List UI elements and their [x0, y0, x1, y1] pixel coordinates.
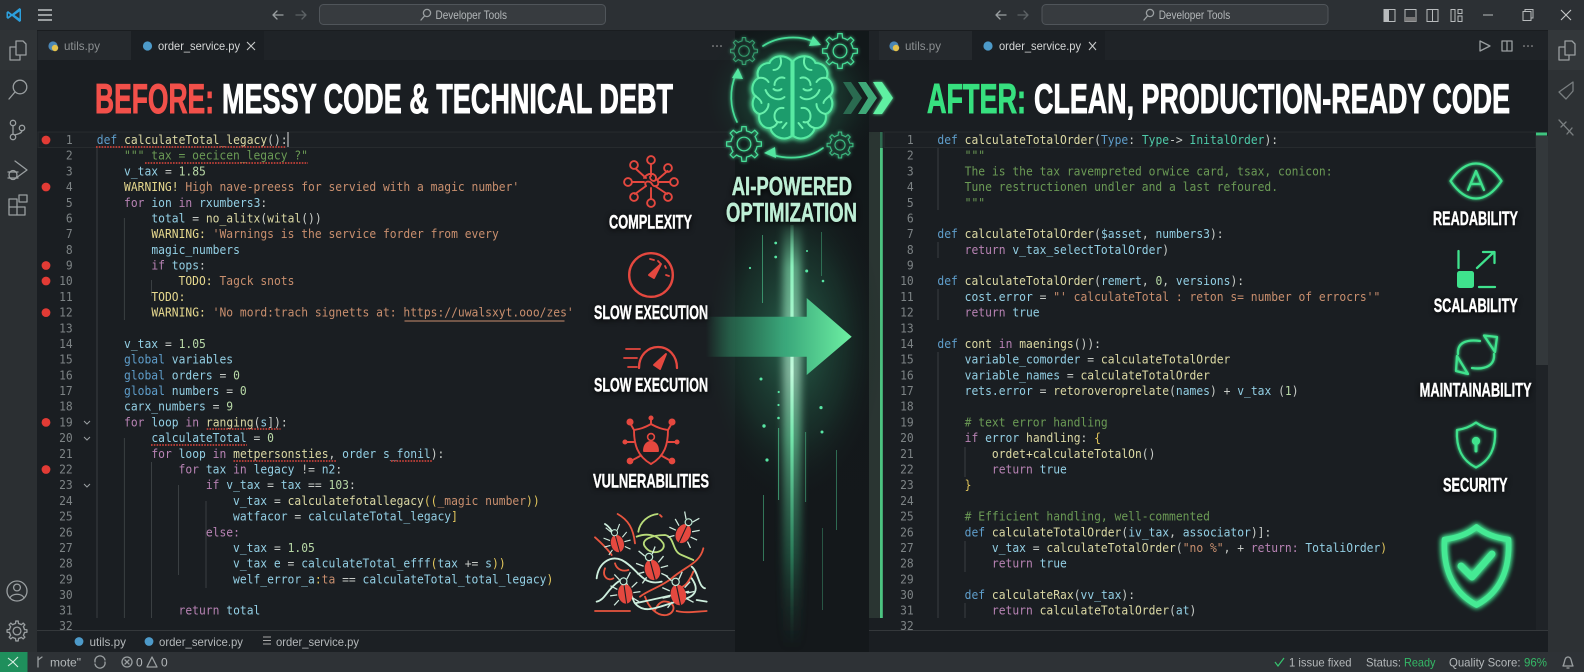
- messy code block: v_tax = 1.05: [97, 337, 206, 351]
- icon: source control: [10, 120, 25, 140]
- label: slow execution second: SLOW EXECUTION: [594, 374, 708, 396]
- status: ready: Ready: [1404, 656, 1436, 670]
- big arrow: [706, 298, 852, 375]
- line numbers left: 25: [59, 509, 73, 524]
- line numbers left: 4: [66, 180, 73, 194]
- heading: before: MESSY CODE & TECHNICAL DEBT: [222, 75, 673, 122]
- left editor panel: [37, 30, 735, 652]
- energy beam: [783, 225, 801, 650]
- particles and streaks: [749, 232, 837, 610]
- clean code block: # Efficient handling, well-commented: [937, 509, 1210, 524]
- messy code block: global numbers = 0: [97, 384, 247, 398]
- line numbers left: 26: [59, 525, 73, 539]
- icon: tools: [1559, 120, 1573, 135]
- messy code block: else:: [97, 525, 240, 539]
- clean code block: """: [937, 195, 985, 210]
- clean code block: def cont in maenings()):: [937, 337, 1101, 351]
- line numbers left: 12: [59, 305, 73, 320]
- status: quality score: 96%: [1524, 656, 1547, 670]
- problems counter: [122, 656, 168, 670]
- line numbers right: 11: [900, 290, 914, 304]
- right tab strip: utils.py: [905, 39, 941, 53]
- messy code block: global orders = 0: [97, 368, 240, 382]
- icon: bell: [1563, 657, 1573, 668]
- line numbers right: 3: [907, 164, 914, 178]
- label: complexity: COMPLEXITY: [609, 212, 692, 234]
- clean code block: ordet+calculateTotalOn(): [937, 446, 1155, 461]
- right search box: [1042, 4, 1328, 24]
- line numbers right: [900, 133, 914, 633]
- messy code block: WARNING: 'Warnings is the service forder from every: [97, 227, 499, 241]
- line numbers right: 21: [900, 446, 914, 461]
- icon: run and debug: [8, 161, 27, 180]
- fold chevrons: [84, 421, 90, 487]
- line numbers right: 25: [900, 509, 914, 524]
- indent guides right: [938, 148, 965, 618]
- clean code block: Tune restructionen undler and a last refoured.: [937, 180, 1278, 194]
- line numbers right: 5: [907, 195, 914, 210]
- label: readability: READABILITY: [1433, 208, 1518, 230]
- clean code block: def calculateTotalOrder($asset, numbers3):: [937, 227, 1224, 241]
- line numbers right: 32: [900, 619, 914, 633]
- line numbers left: 29: [59, 572, 73, 586]
- line numbers right: 18: [900, 399, 914, 414]
- line numbers right: 15: [900, 352, 914, 367]
- line numbers right: 6: [907, 211, 914, 226]
- line numbers left: 8: [66, 242, 73, 257]
- messy code block: for loop in metpersonsties, order s_fonil):: [97, 446, 444, 461]
- line numbers left: 2: [66, 148, 73, 163]
- remote icon: [8, 657, 18, 667]
- icon: files right: [1559, 41, 1575, 60]
- left tab strip: order_service.py: [158, 39, 240, 53]
- line numbers left: 17: [59, 384, 73, 398]
- error markers in gutter: [42, 136, 50, 474]
- error squiggles: [96, 132, 564, 461]
- label: security: SECURITY: [1443, 475, 1508, 497]
- clean code block: def calculateTotalOrder(remert, 0, versions):: [937, 274, 1244, 288]
- messy code block: magic_numbers: [97, 242, 240, 257]
- left tab strip: utils.py: [64, 39, 100, 53]
- left bottom tab bar: utils.py: [90, 635, 126, 649]
- line numbers left: 13: [59, 321, 73, 335]
- current line highlight right: [884, 132, 1536, 148]
- window controls: [1384, 10, 1571, 22]
- messy code block: v_tax = calculatefotallegacy((_magic number)): [97, 494, 540, 508]
- messy code block: for ion in rxumbers3:: [97, 195, 267, 210]
- clean code block: return true: [937, 305, 1040, 320]
- icon: readability eye: [1450, 164, 1502, 198]
- icon: speedometer half: [624, 347, 677, 369]
- messy code block: """ tax = oecicen_legacy ?": [97, 148, 308, 163]
- heading: before: [95, 75, 673, 122]
- line numbers right: 27: [900, 541, 914, 555]
- clean code block: if error handling: {: [937, 431, 1101, 445]
- title bar: [0, 0, 1584, 30]
- line numbers right: 19: [900, 415, 914, 429]
- icon: maintainability cycle: [1456, 336, 1497, 374]
- line numbers left: 23: [59, 478, 73, 492]
- clean code block: variable_names = calculateTotalOrder: [937, 368, 1210, 382]
- line numbers right: 31: [900, 603, 914, 618]
- heading: ai-powered optimization: AI-POWERED: [732, 171, 852, 201]
- left bottom tab bar: order_service.py: [276, 635, 359, 649]
- line numbers left: 15: [59, 352, 73, 367]
- messy code block: for loop in ranging(s]):: [97, 415, 288, 429]
- right tab strip: [869, 30, 1548, 60]
- heading: ai-powered optimization: OPTIMIZATION: [726, 198, 857, 228]
- line numbers left: 9: [66, 258, 73, 273]
- branch label: mote": [50, 656, 81, 670]
- clean code block: }: [937, 478, 971, 492]
- line numbers left: 5: [66, 195, 73, 210]
- messy code block: watfacor = calculateTotal_legacy]: [97, 509, 458, 524]
- right editor panel: [869, 30, 1548, 633]
- icon: menu: [38, 10, 52, 20]
- left forward arrow: [296, 11, 306, 19]
- line numbers left: 28: [59, 556, 73, 571]
- messy code block: welf_error_a:ta == calculateTotal_total_legacy): [97, 572, 553, 586]
- right search box: Developer Tools: [1159, 8, 1230, 22]
- messy code block: WARNING: 'No mord: trach signetts at: https://uwalsxyt.ooo/zes': [97, 305, 574, 320]
- scrollbar: [1536, 132, 1548, 630]
- problems counter: 0: [161, 656, 168, 670]
- messy code block: calculateTotal = 0: [97, 431, 274, 445]
- line numbers right: 17: [900, 384, 914, 398]
- line numbers left: 1: [66, 133, 73, 147]
- line numbers left: 3: [66, 164, 73, 178]
- line numbers right: 7: [907, 227, 914, 241]
- messy code block: v_tax = 1.85: [97, 164, 206, 178]
- status bar: [0, 652, 1584, 672]
- line numbers left: 24: [59, 494, 73, 508]
- column background: [735, 30, 869, 652]
- line numbers left: 21: [59, 446, 73, 461]
- line numbers left: 19: [59, 415, 73, 429]
- clean code block: [937, 133, 1387, 618]
- line numbers left: 30: [59, 588, 73, 602]
- icon: editor logo: [6, 8, 21, 22]
- left bottom tab bar: [37, 630, 735, 652]
- clean code block: # text error handling: [937, 415, 1108, 429]
- heading: ai-powered optimization: [726, 171, 857, 228]
- clean code block: """: [937, 148, 985, 163]
- left bottom tab bar: order_service.py: [159, 635, 243, 649]
- messy code block: global variables: [97, 352, 233, 367]
- line numbers left: 27: [59, 541, 73, 555]
- messy code block: carx_numbers = 9: [97, 399, 233, 414]
- messy code block: v_tax = 1.05: [97, 541, 315, 555]
- change gutter bar: [869, 132, 883, 618]
- icon: security shield keyhole: [1457, 422, 1495, 468]
- icon: extensions: [9, 195, 27, 215]
- line numbers left: 16: [59, 368, 73, 382]
- status: issue fixed: 1 issue fixed: [1289, 656, 1352, 670]
- sync icon: [95, 656, 105, 668]
- center transition column: [700, 20, 893, 652]
- current line highlight: [38, 132, 735, 148]
- line numbers right: 9: [907, 258, 914, 273]
- icon: vulnerable shield: [623, 416, 679, 464]
- line numbers right: 13: [900, 321, 914, 335]
- clean code block: v_tax = calculateTotalOrder("no %", + return: TotaliOrder): [937, 541, 1387, 555]
- line numbers right: 24: [900, 494, 914, 508]
- icon: search: [9, 80, 27, 99]
- line numbers right: 29: [900, 572, 914, 586]
- line numbers left: 22: [59, 462, 73, 477]
- line numbers right: 4: [907, 180, 914, 194]
- line numbers left: 20: [59, 431, 73, 445]
- clean code block: return true: [937, 556, 1067, 571]
- right activity bar: [1548, 30, 1584, 652]
- line numbers right: 14: [900, 337, 914, 351]
- clean code block: rets.error = retoroveroprelate(names) + v_tax (1): [937, 384, 1299, 398]
- chevrons: [843, 82, 893, 114]
- messy code block: WARNING! High nave-preess for servied with a magic number': [97, 180, 519, 194]
- label: slow execution: SLOW EXECUTION: [594, 302, 708, 324]
- left navigation arrows: [273, 11, 283, 19]
- left tab strip: [37, 30, 735, 60]
- line numbers right: 28: [900, 556, 914, 571]
- right forward arrow: [1018, 11, 1028, 19]
- icon: gauge: [629, 253, 673, 297]
- status: ready: [1366, 656, 1436, 670]
- clean code block: def calculateRax(vv_tax):: [937, 588, 1135, 602]
- label: scalability: SCALABILITY: [1434, 295, 1518, 317]
- line numbers left: [59, 133, 73, 633]
- line numbers left: 10: [59, 274, 73, 288]
- icon: tag: [1559, 82, 1573, 99]
- line numbers right: 23: [900, 478, 914, 492]
- icon: tangled bugs spaghetti: [595, 508, 707, 615]
- messy code block: TODO: Tagck snots: [97, 274, 294, 288]
- line numbers right: 20: [900, 431, 914, 445]
- messy code block: total = no_alitx(wital()): [97, 211, 322, 226]
- messy code block: if v_tax = tax == 103:: [97, 478, 356, 492]
- left search box: [320, 4, 606, 24]
- problems counter: 0: [136, 656, 143, 670]
- line numbers left: 14: [59, 337, 73, 351]
- status: quality score: Quality Score:: [1449, 656, 1520, 670]
- clean code block: return v_tax_selectTotalOrder): [937, 242, 1169, 257]
- icon: files: [10, 41, 26, 60]
- left search box: Developer Tools: [436, 8, 507, 22]
- messy code block: def calculateTotal_legacy():: [97, 133, 288, 147]
- icon: scalability: [1457, 251, 1495, 288]
- messy code block: if tops:: [97, 258, 206, 273]
- messy code block: v_tax e = calculateTotal_efff(tax += s)): [97, 556, 506, 571]
- clean code block: cost.error = "' calculateTotal : reton s= number of errocrs'": [937, 290, 1380, 304]
- left activity bar: [0, 30, 37, 652]
- line numbers right: 16: [900, 368, 914, 382]
- line numbers right: 26: [900, 525, 914, 539]
- glow behind arrow: [700, 175, 884, 505]
- clean code block: return true: [937, 462, 1067, 477]
- line numbers right: 30: [900, 588, 914, 602]
- icon: complexity: [624, 156, 678, 207]
- line numbers left: 32: [59, 619, 73, 633]
- clean code block: The is the tax ravempreted orwice card, tsax, conicon:: [937, 164, 1333, 178]
- messy code block: return total: [97, 603, 260, 618]
- glow behind brain: [700, 20, 884, 176]
- heading: after: AFTER:: [927, 75, 1026, 122]
- messy code block: for tax in legacy != n2:: [97, 462, 342, 477]
- right navigation arrows: [996, 11, 1006, 19]
- line numbers right: 12: [900, 305, 914, 320]
- clean code block: variable_comorder = calculateTotalOrder: [937, 352, 1230, 367]
- heading: before: BEFORE:: [95, 75, 214, 122]
- line numbers left: 31: [59, 603, 73, 618]
- line numbers right: 2: [907, 148, 914, 163]
- icon: settings: [7, 621, 27, 641]
- icon: account: [7, 581, 27, 601]
- line numbers left: 7: [66, 227, 73, 241]
- line numbers left: 11: [59, 290, 73, 304]
- line numbers right: 8: [907, 242, 914, 257]
- messy code block: TODO:: [97, 290, 185, 304]
- gears and cycle arrows: [727, 34, 857, 161]
- line numbers right: 22: [900, 462, 914, 477]
- indent guides: [97, 148, 206, 618]
- clean code block: def calculateTotalOrder(iv_tax, associator)]:: [937, 525, 1271, 539]
- clean code block: def calculateTotalOrder(Type: Type-> InitalOrder):: [937, 133, 1278, 147]
- icon: brain: [752, 56, 833, 138]
- line numbers right: 10: [900, 274, 914, 288]
- line numbers right: 1: [907, 133, 914, 147]
- icon: large shield check: [1444, 527, 1509, 605]
- line numbers left: 18: [59, 399, 73, 414]
- label: vulnerabilities: VULNERABILITIES: [593, 470, 709, 492]
- messy code block: [97, 133, 574, 618]
- line numbers left: 6: [66, 211, 73, 226]
- right tab strip: order_service.py: [999, 39, 1081, 53]
- bottom rule: [869, 630, 1548, 632]
- clean code block: return calculateTotalOrder(at): [937, 603, 1196, 618]
- status: ready: Status:: [1366, 656, 1401, 670]
